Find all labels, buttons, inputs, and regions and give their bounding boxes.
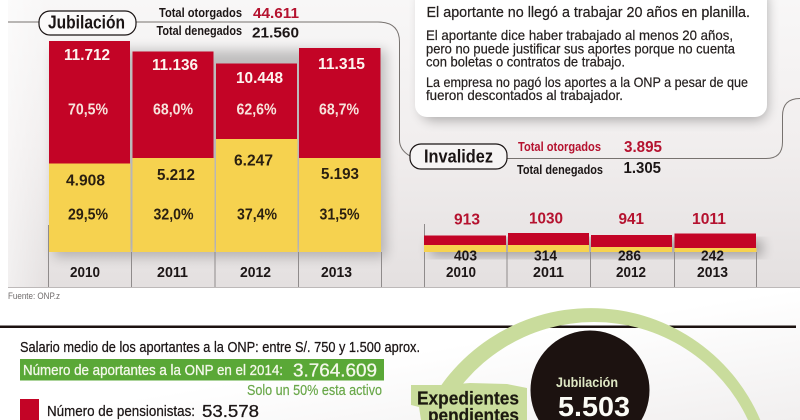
bar 2011: 2011 <box>157 265 188 281</box>
bar 2010: 2010 <box>446 265 476 281</box>
bar 2010: 403 <box>454 248 477 264</box>
bar 2012: 62,6% <box>236 102 276 118</box>
Invalidez totals: Total otorgados <box>518 140 601 154</box>
label: pending files <box>411 383 527 420</box>
panel: reasons card: El aportante dice haber trabajado al menos 20 años, <box>426 28 733 43</box>
panel: reasons card <box>415 0 767 120</box>
Jubilación totals: 44.611 <box>253 5 299 22</box>
panel: Jubilación bar chart <box>48 41 386 287</box>
pensioners legend <box>20 399 259 420</box>
bar 2012: 286 <box>618 248 641 264</box>
panel: reasons card: La empresa no pagó los aportes a la ONP a pesar de que <box>426 75 748 90</box>
bar 2011: 1030 <box>529 210 563 228</box>
bar 2010: 70,5% <box>68 102 108 118</box>
label: Invalidez pill <box>410 144 507 169</box>
bar 2011: 68,0% <box>153 102 193 118</box>
bar 2012 <box>591 211 672 281</box>
bar 2012 <box>216 64 298 281</box>
bar 2013: 31,5% <box>320 206 360 224</box>
pensioners legend: Número de pensionistas: <box>47 404 195 420</box>
Invalidez totals <box>517 139 662 177</box>
circle: Jubilación pending <box>530 331 650 420</box>
connector line: Invalidez frame <box>507 98 800 158</box>
bar 2010: 913 <box>454 212 480 228</box>
bar 2010 <box>424 212 506 281</box>
bar 2013: 1011 <box>692 211 726 228</box>
bar 2013: 5.193 <box>321 166 359 183</box>
banner: contributors <box>20 359 384 380</box>
bar 2010: 4.908 <box>66 172 105 190</box>
bar 2013: 242 <box>701 248 724 264</box>
bar 2011: 11.136 <box>152 57 198 74</box>
label: pending files: Expedientes <box>417 388 519 408</box>
Invalidez totals: 1.305 <box>624 160 661 177</box>
bar 2010: 29,5% <box>68 206 108 224</box>
bar 2011: 5.212 <box>157 167 195 184</box>
note: active share: Solo un 50% esta activo <box>247 383 382 399</box>
bar 2013: 2013 <box>697 265 728 281</box>
panel: reasons card: pero no puede justificar sus aportes porque no cuenta <box>426 42 735 56</box>
bar 2012: 37,4% <box>237 206 277 224</box>
Jubilación totals <box>156 5 299 42</box>
bar 2011: 32,0% <box>154 206 194 224</box>
label: Jubilación pill: Jubilación <box>48 12 125 32</box>
section divider <box>0 326 796 328</box>
banner: contributors: 3.764.609 <box>293 360 377 380</box>
bar 2013 <box>674 211 756 281</box>
bar 2010: 2010 <box>70 265 100 281</box>
Invalidez totals: Total denegados <box>517 163 603 177</box>
label: Invalidez pill: Invalidez <box>424 146 493 166</box>
source note: Fuente: ONP.z <box>8 291 60 302</box>
Invalidez totals: 3.895 <box>624 139 662 156</box>
Jubilación totals: 21.560 <box>252 24 299 42</box>
bar 2012: 941 <box>618 211 644 228</box>
connector line: Jubilación frame <box>8 22 410 156</box>
banner: contributors: Número de aportantes a la ONP en el 2014: <box>23 363 283 379</box>
panel: reasons card: con boletas o contratos de trabajo. <box>426 54 625 70</box>
bar 2012: 2012 <box>616 265 646 281</box>
panel: reasons card: El aportante no llegó a trabajar 20 años en planilla. <box>426 5 750 21</box>
panel: Invalidez bar chart <box>424 210 762 287</box>
bar 2012: 6.247 <box>234 152 273 170</box>
bar 2011 <box>132 52 214 281</box>
bar 2013 <box>299 48 381 281</box>
bar 2012: 10.448 <box>236 70 283 87</box>
Jubilación totals: Total denegados <box>156 24 242 38</box>
bar 2010 <box>49 41 130 281</box>
bar 2012: 2012 <box>240 265 271 281</box>
bar 2013: 2013 <box>321 265 352 281</box>
circle: Jubilación pending: Jubilación <box>556 375 618 390</box>
bar 2010: 11.712 <box>64 47 110 64</box>
panel: reasons card: fueron descontados al trabajador. <box>426 88 623 103</box>
bar 2011: 2011 <box>533 265 564 281</box>
bar 2011 <box>508 210 589 281</box>
Jubilación totals: Total otorgados <box>159 6 242 20</box>
bar 2011: 314 <box>534 248 557 264</box>
bar 2013: 68,7% <box>319 102 359 118</box>
bar 2013: 11.315 <box>318 56 365 73</box>
green ring <box>422 308 760 420</box>
salary line: Salario medio de los aportantes a la ONP: entre S/. 750 y 1.500 aprox. <box>20 340 420 356</box>
